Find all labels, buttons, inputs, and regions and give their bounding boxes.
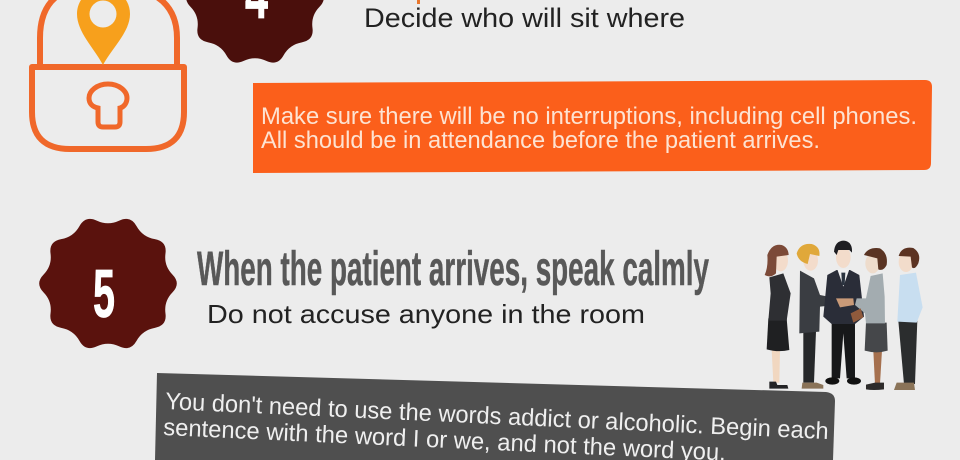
callout: orange no interruptions (253, 80, 932, 173)
callout: orange no interruptions: All should be in attendance before the patient arrives. (261, 127, 820, 154)
icon: padlock with location pin (32, 0, 184, 149)
handshake (836, 298, 854, 307)
text: decide who will sit where: Decide who will sit where (364, 3, 685, 33)
callout: orange no interruptions: Make sure there will be no interruptions, including cell phones. (261, 103, 917, 130)
person: woman with long brown hair (765, 245, 791, 389)
person: man in blue shirt (894, 248, 923, 390)
badge: number 5: 5 (93, 256, 115, 332)
callout: grey language advice (155, 373, 835, 460)
callout: grey language advice: You don't need to use the words addict or alcoholic. Begin each (165, 388, 829, 445)
badge: number 5 (39, 219, 177, 348)
badge: number 4 (186, 0, 324, 63)
illustration: group of business people (765, 241, 923, 390)
person: woman in grey jacket (851, 248, 888, 390)
person: blond man shaking hands (797, 244, 837, 389)
person: central man in dark suit (823, 241, 864, 385)
text: do not accuse anyone: Do not accuse anyone in the room (207, 299, 645, 329)
heading fragment: descender of cropped step 4 title (417, 0, 420, 4)
